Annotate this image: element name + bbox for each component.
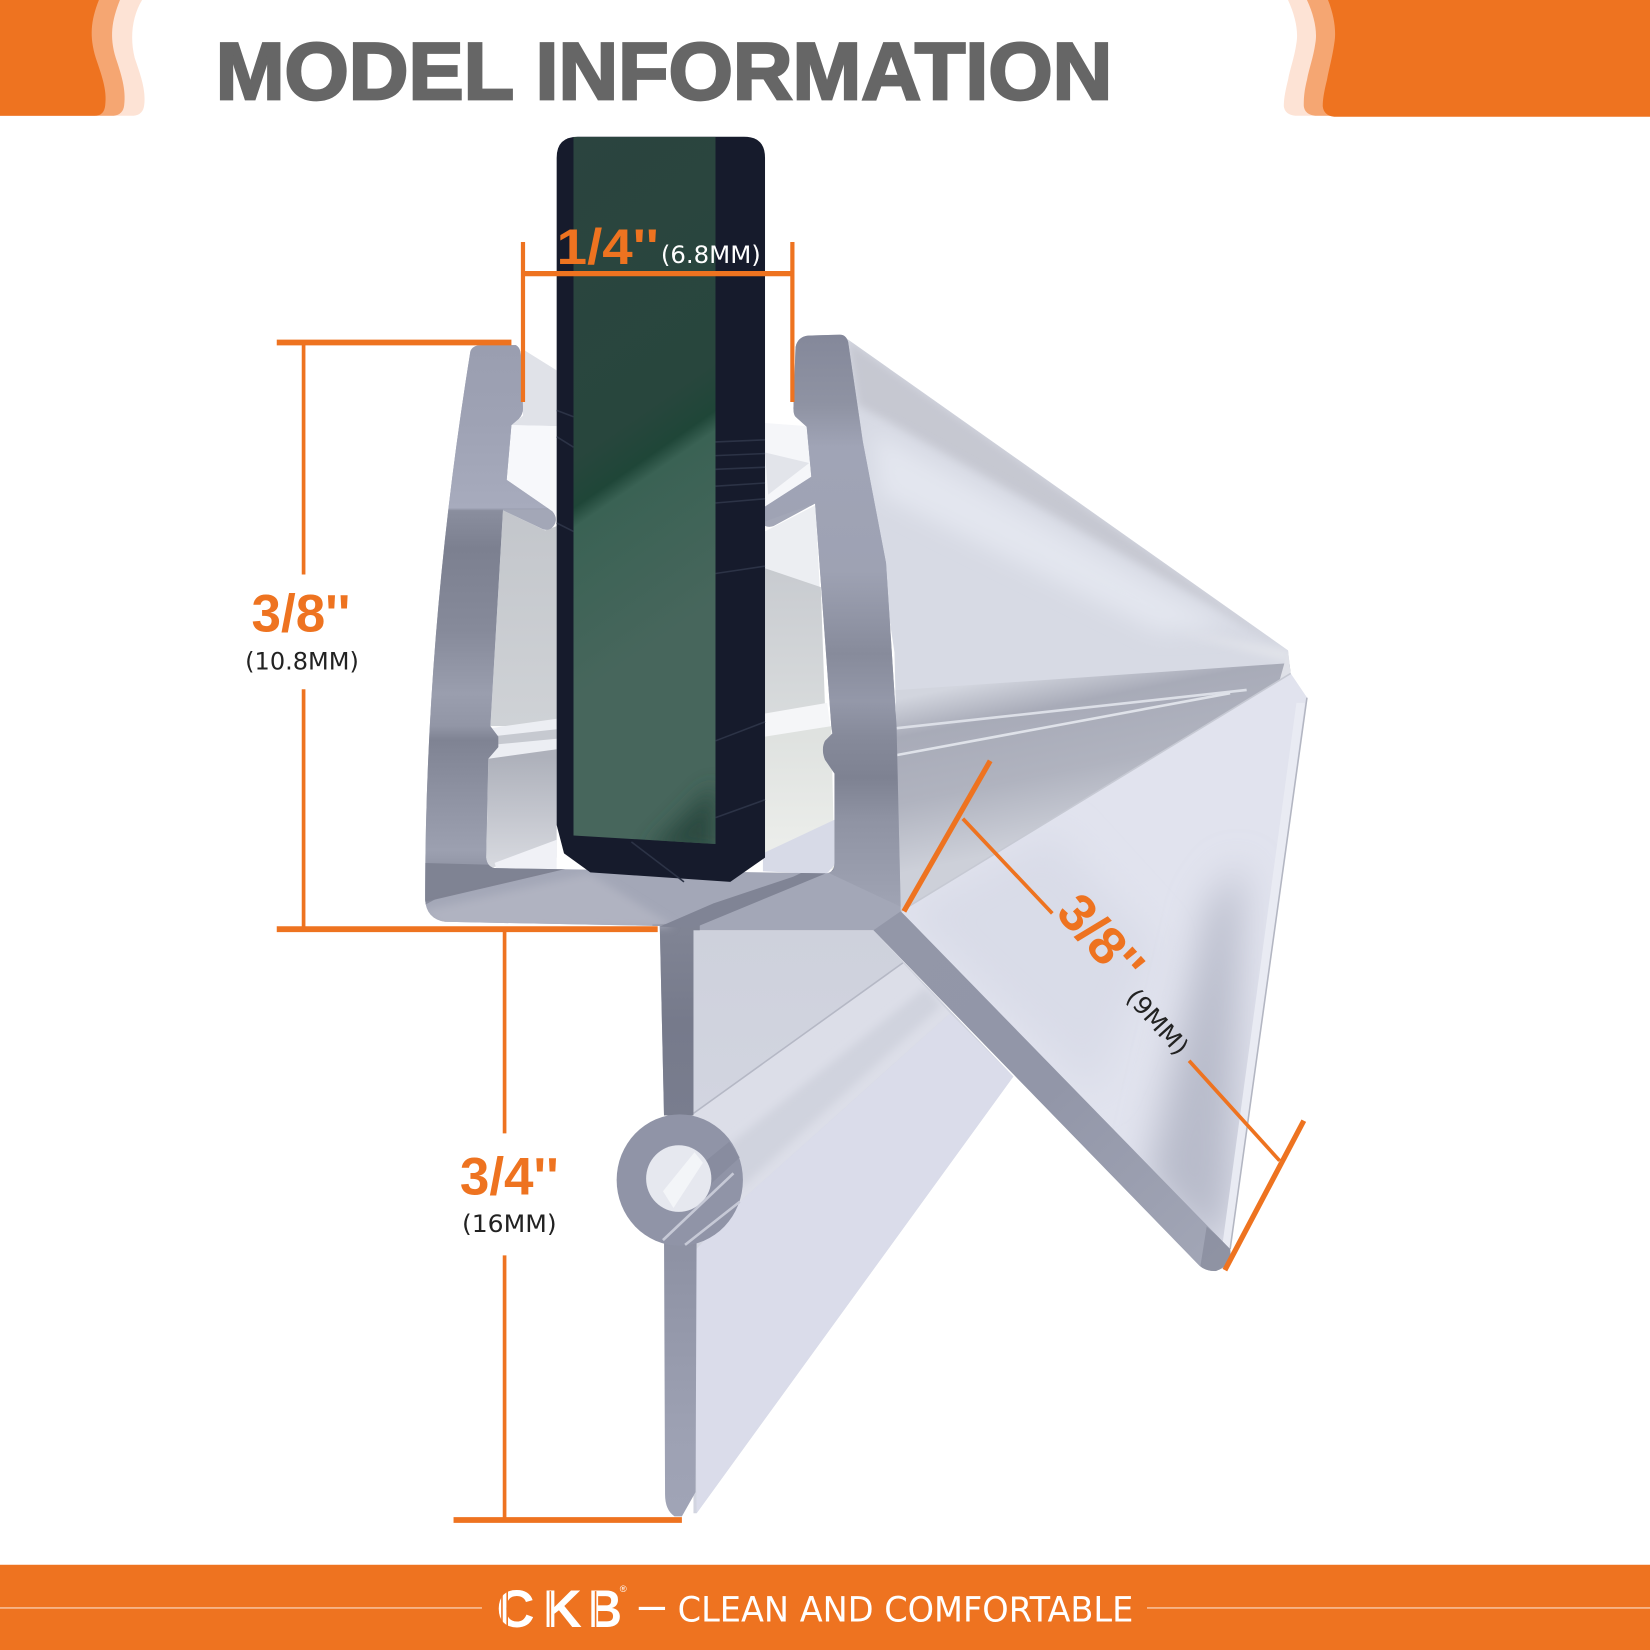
brand logo: K [543, 1580, 582, 1639]
product: transparent seal profile [421, 326, 1315, 1516]
dimension: 3/8 inch channel height: 3/8'' [251, 584, 350, 643]
tagline: CLEAN AND COMFORTABLE [678, 1591, 1133, 1631]
header: left orange wave banner [0, 0, 145, 116]
dimension: 1/4 inch glass width [523, 218, 792, 402]
dimension: 3/8 inch channel height [245, 342, 658, 929]
glass panel [557, 137, 765, 882]
channel interior [486, 349, 834, 874]
dimension: 3/8 inch fin width [904, 761, 1304, 1270]
brand logo: ® [620, 1584, 627, 1595]
title: MODEL INFORMATION [216, 27, 1112, 117]
brand logo: C [497, 1580, 535, 1639]
dimension: 3/8 inch channel height: (10.8MM) [245, 647, 359, 675]
dimension: 3/4 inch flange height: 3/4'' [460, 1147, 559, 1206]
glass green face [574, 137, 716, 852]
brand logo [497, 1580, 627, 1639]
dimension: 3/8 inch fin width: (9MM) [1120, 983, 1194, 1061]
glass reflection streaks [557, 410, 765, 882]
footer bar [0, 1565, 1650, 1650]
dimension: 3/4 inch flange height: (16MM) [462, 1210, 557, 1238]
dimension: 1/4 inch glass width: (6.8MM) [661, 241, 761, 269]
seal upper wing [842, 326, 1307, 915]
brand logo: B [588, 1580, 622, 1639]
seal tube ring [617, 1114, 743, 1246]
seal lower right fin [894, 663, 1315, 1263]
dimension: 3/4 inch flange height [454, 929, 682, 1520]
dimension: 3/8 inch fin width: 3/8'' [1045, 882, 1155, 995]
dash [639, 1607, 665, 1610]
seal flange lower edge [664, 1231, 697, 1516]
dimension: 1/4 inch glass width: 1/4'' [557, 218, 659, 275]
seal lower flange [693, 930, 1013, 1513]
seal cross-section [425, 334, 1230, 1272]
header: right orange wave banner [1284, 0, 1650, 117]
